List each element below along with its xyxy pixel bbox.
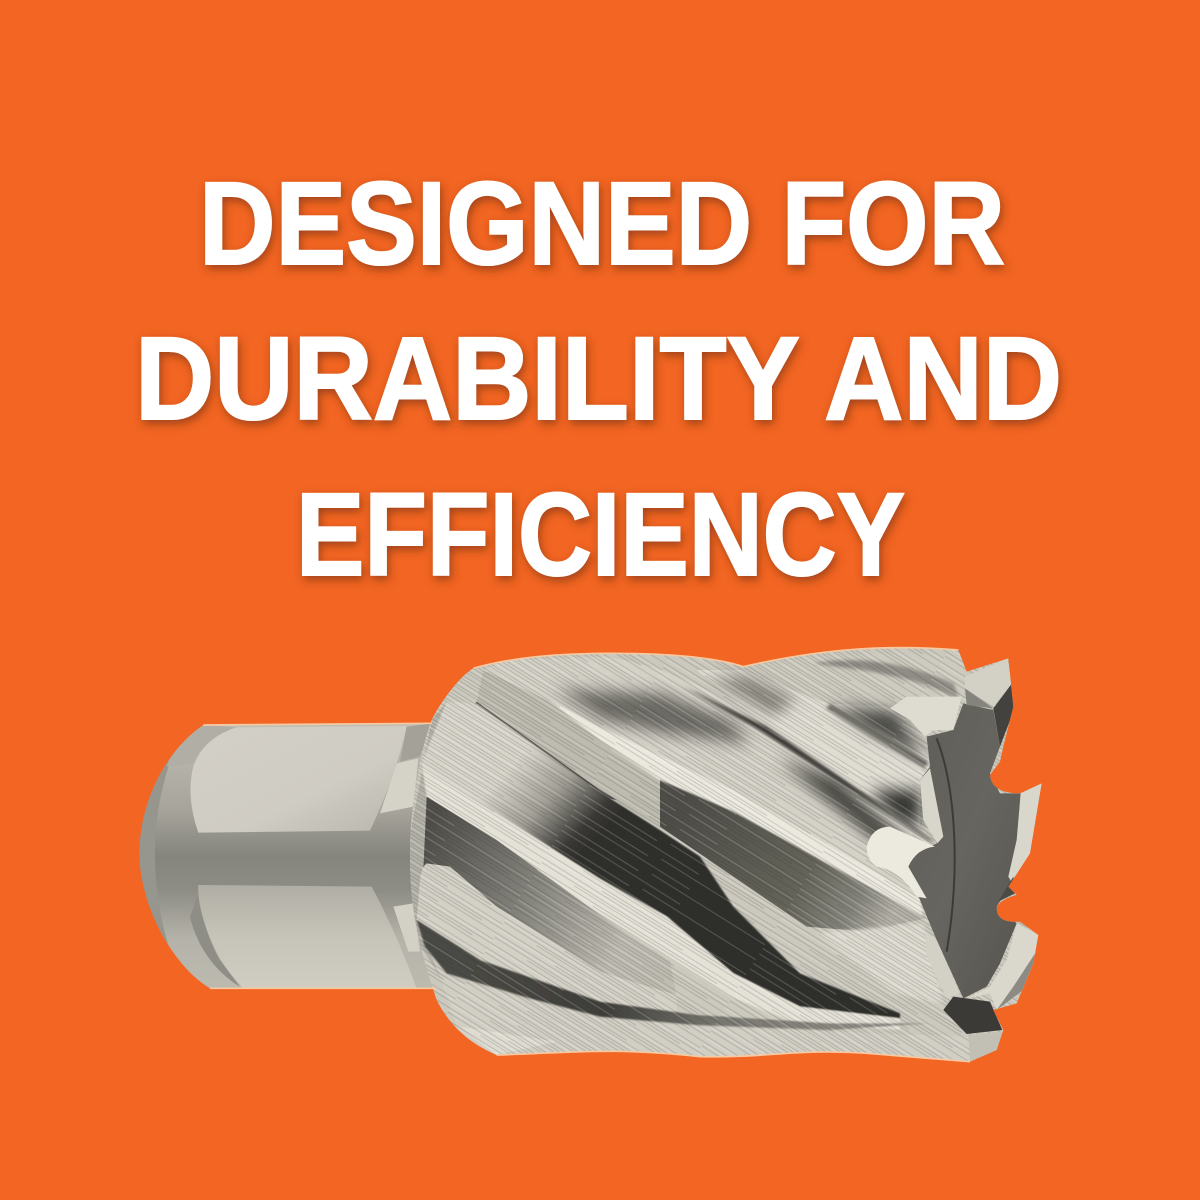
top curl bbox=[890, 697, 962, 737]
title: DURABILITY AND bbox=[135, 313, 1062, 445]
machining streaks bbox=[403, 640, 1050, 1070]
hatched gray patch bbox=[423, 797, 677, 997]
end face bbox=[907, 703, 1021, 998]
right tooth bbox=[1008, 783, 1042, 885]
top tooth bbox=[965, 658, 1012, 707]
lower tooth bbox=[967, 923, 1038, 1010]
cutter body with helical flutes bbox=[403, 640, 1050, 1070]
infographic canvas bbox=[138, 179, 1066, 1062]
wide band with soft streaks bbox=[484, 657, 936, 894]
band edge line bbox=[683, 687, 937, 843]
left rim bbox=[410, 702, 446, 976]
cutting teeth and end face bbox=[867, 658, 1042, 1062]
title bbox=[135, 158, 1062, 601]
lower strip bbox=[925, 933, 960, 998]
lower dark flute bbox=[417, 920, 930, 1030]
side strip bbox=[920, 768, 943, 843]
hatched light band bbox=[477, 670, 660, 827]
annular cutter illustration bbox=[130, 640, 1050, 1070]
thin dark line bbox=[473, 702, 617, 800]
upper lobe bbox=[960, 656, 964, 664]
bottom light band bbox=[466, 1036, 974, 1062]
bottom dark block bbox=[943, 997, 1002, 1034]
deep flute bbox=[422, 702, 900, 1018]
bottom edge bbox=[968, 1032, 1002, 1062]
cutter shank bbox=[130, 720, 443, 993]
lower bright strip bbox=[422, 765, 900, 1030]
lower light facet bbox=[417, 863, 677, 1013]
light region by the deep flute bbox=[817, 923, 943, 1003]
gullet curl bbox=[867, 827, 935, 898]
bright highlight bbox=[547, 698, 923, 917]
title: DESIGNED FOR bbox=[199, 158, 1005, 290]
dark gray patch bbox=[660, 778, 925, 932]
title: EFFICIENCY bbox=[296, 469, 905, 601]
upper facet bbox=[697, 670, 937, 843]
inner groove bbox=[937, 738, 955, 952]
silhouette highlight bbox=[203, 648, 970, 1062]
